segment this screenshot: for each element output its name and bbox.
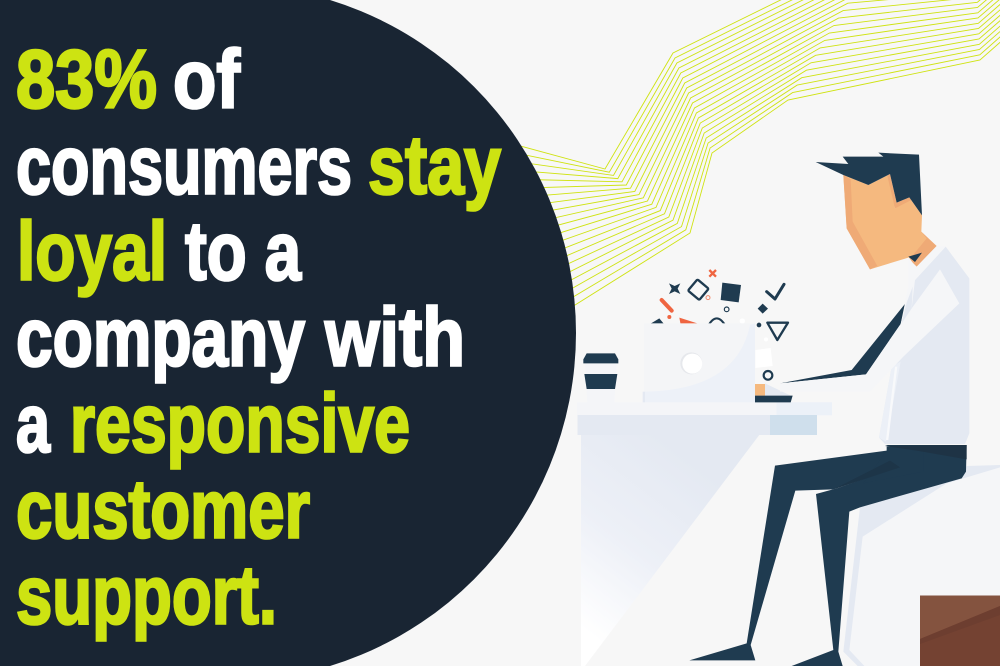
line 6: customer [16, 462, 310, 556]
man: legs [689, 445, 967, 666]
line 5: a [16, 376, 51, 470]
chin shadow [908, 253, 922, 262]
line 2: consumers [16, 118, 352, 212]
line 3: to a [185, 204, 302, 298]
hair [816, 153, 922, 215]
neck [908, 232, 937, 267]
floating icons [650, 270, 788, 380]
line 1: of [173, 32, 240, 126]
man: torso and head [780, 153, 969, 444]
line 2: stay [368, 118, 501, 212]
desk leg with gradient [581, 434, 760, 666]
near arm and shoulder [780, 246, 959, 392]
brown box [920, 596, 1000, 666]
line 4: company [16, 290, 305, 384]
line 5: responsive [70, 376, 410, 470]
shirt front highlight [879, 362, 901, 442]
coffee cup [583, 353, 618, 402]
line 4: with [324, 290, 465, 384]
dark circle panel [0, 0, 576, 666]
face [843, 174, 927, 269]
line 5 [16, 376, 410, 470]
chair [843, 465, 1000, 666]
line 7: support. [16, 548, 277, 642]
line 1: 83% [16, 32, 157, 126]
line 3 [17, 204, 302, 298]
desk top [577, 402, 832, 435]
hand and keyboard [755, 383, 793, 402]
laptop [643, 323, 755, 402]
headline [16, 32, 501, 642]
shirt body [879, 247, 969, 444]
face shading [843, 175, 877, 269]
lime line-art ribbon [480, 0, 1000, 352]
line 3: loyal [17, 204, 167, 298]
far arm [780, 303, 906, 383]
